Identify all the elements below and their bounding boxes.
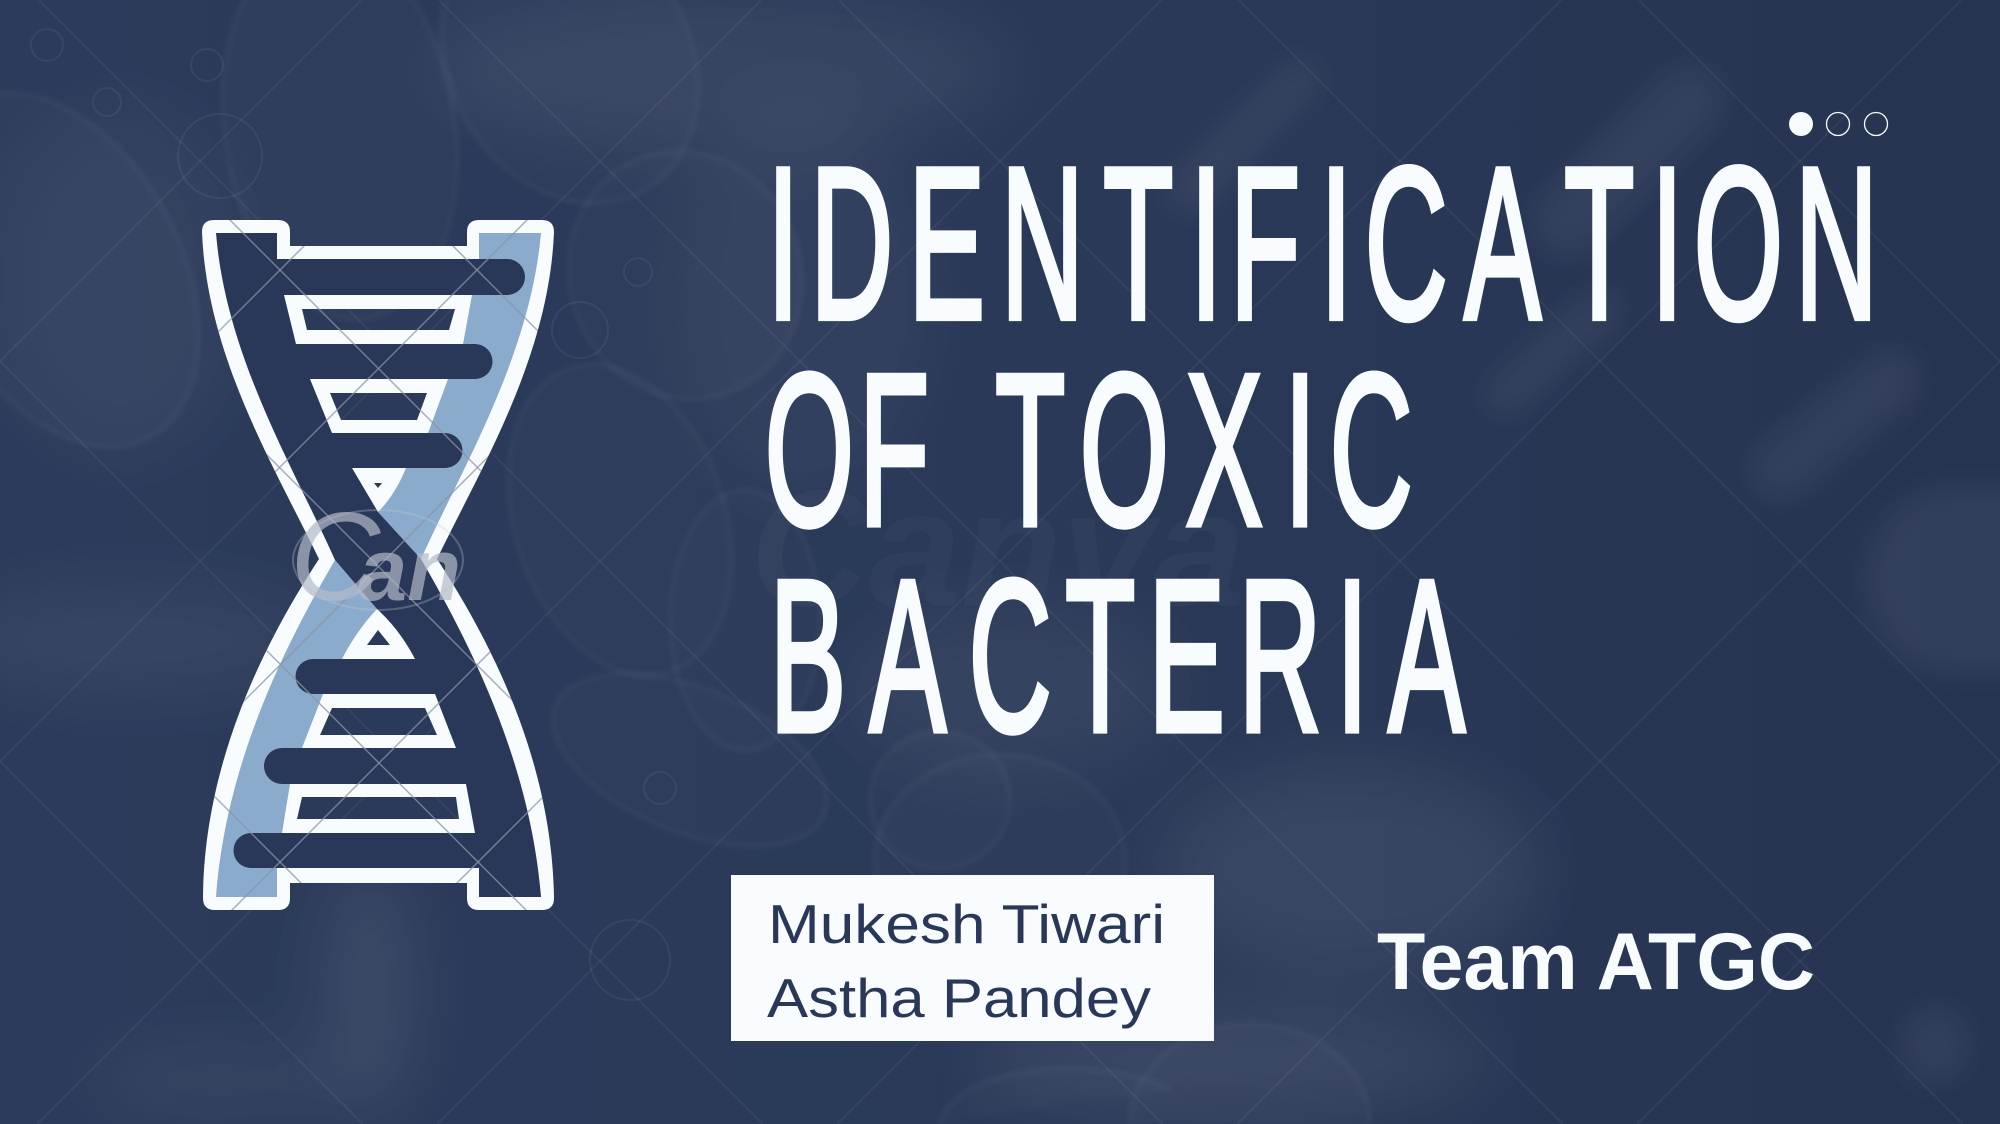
title line 3: BACTERIA (770, 536, 1465, 777)
names box (731, 875, 1214, 1041)
bacteria cells (0, 0, 1370, 1124)
title line 1: IDENTIFICATION (767, 123, 1878, 364)
name 2: Astha Pandey (767, 967, 1152, 1029)
soft lit areas of the bacteria photo (0, 0, 1540, 1120)
name 1: Mukesh Tiwari (768, 893, 1165, 955)
light blue strand, upper (378, 233, 541, 559)
pagination dots (1789, 112, 1888, 136)
title line 2: OF TOXIC (765, 330, 1412, 571)
white outline with rung openings (202, 220, 554, 910)
icon watermark lines (214, 220, 542, 910)
light blue strand, lower (216, 560, 377, 897)
faint watermark word: Canva (750, 456, 1245, 640)
icon watermark word: Can (290, 488, 461, 627)
small vesicles (31, 29, 676, 1000)
blurred rod bacteria (1190, 80, 2000, 1050)
team name: Team ATGC (1377, 917, 1815, 1007)
DNA helix icon (202, 220, 554, 910)
icon watermark ring (293, 510, 463, 610)
navy strand and rungs (216, 233, 541, 897)
title (765, 123, 1878, 777)
